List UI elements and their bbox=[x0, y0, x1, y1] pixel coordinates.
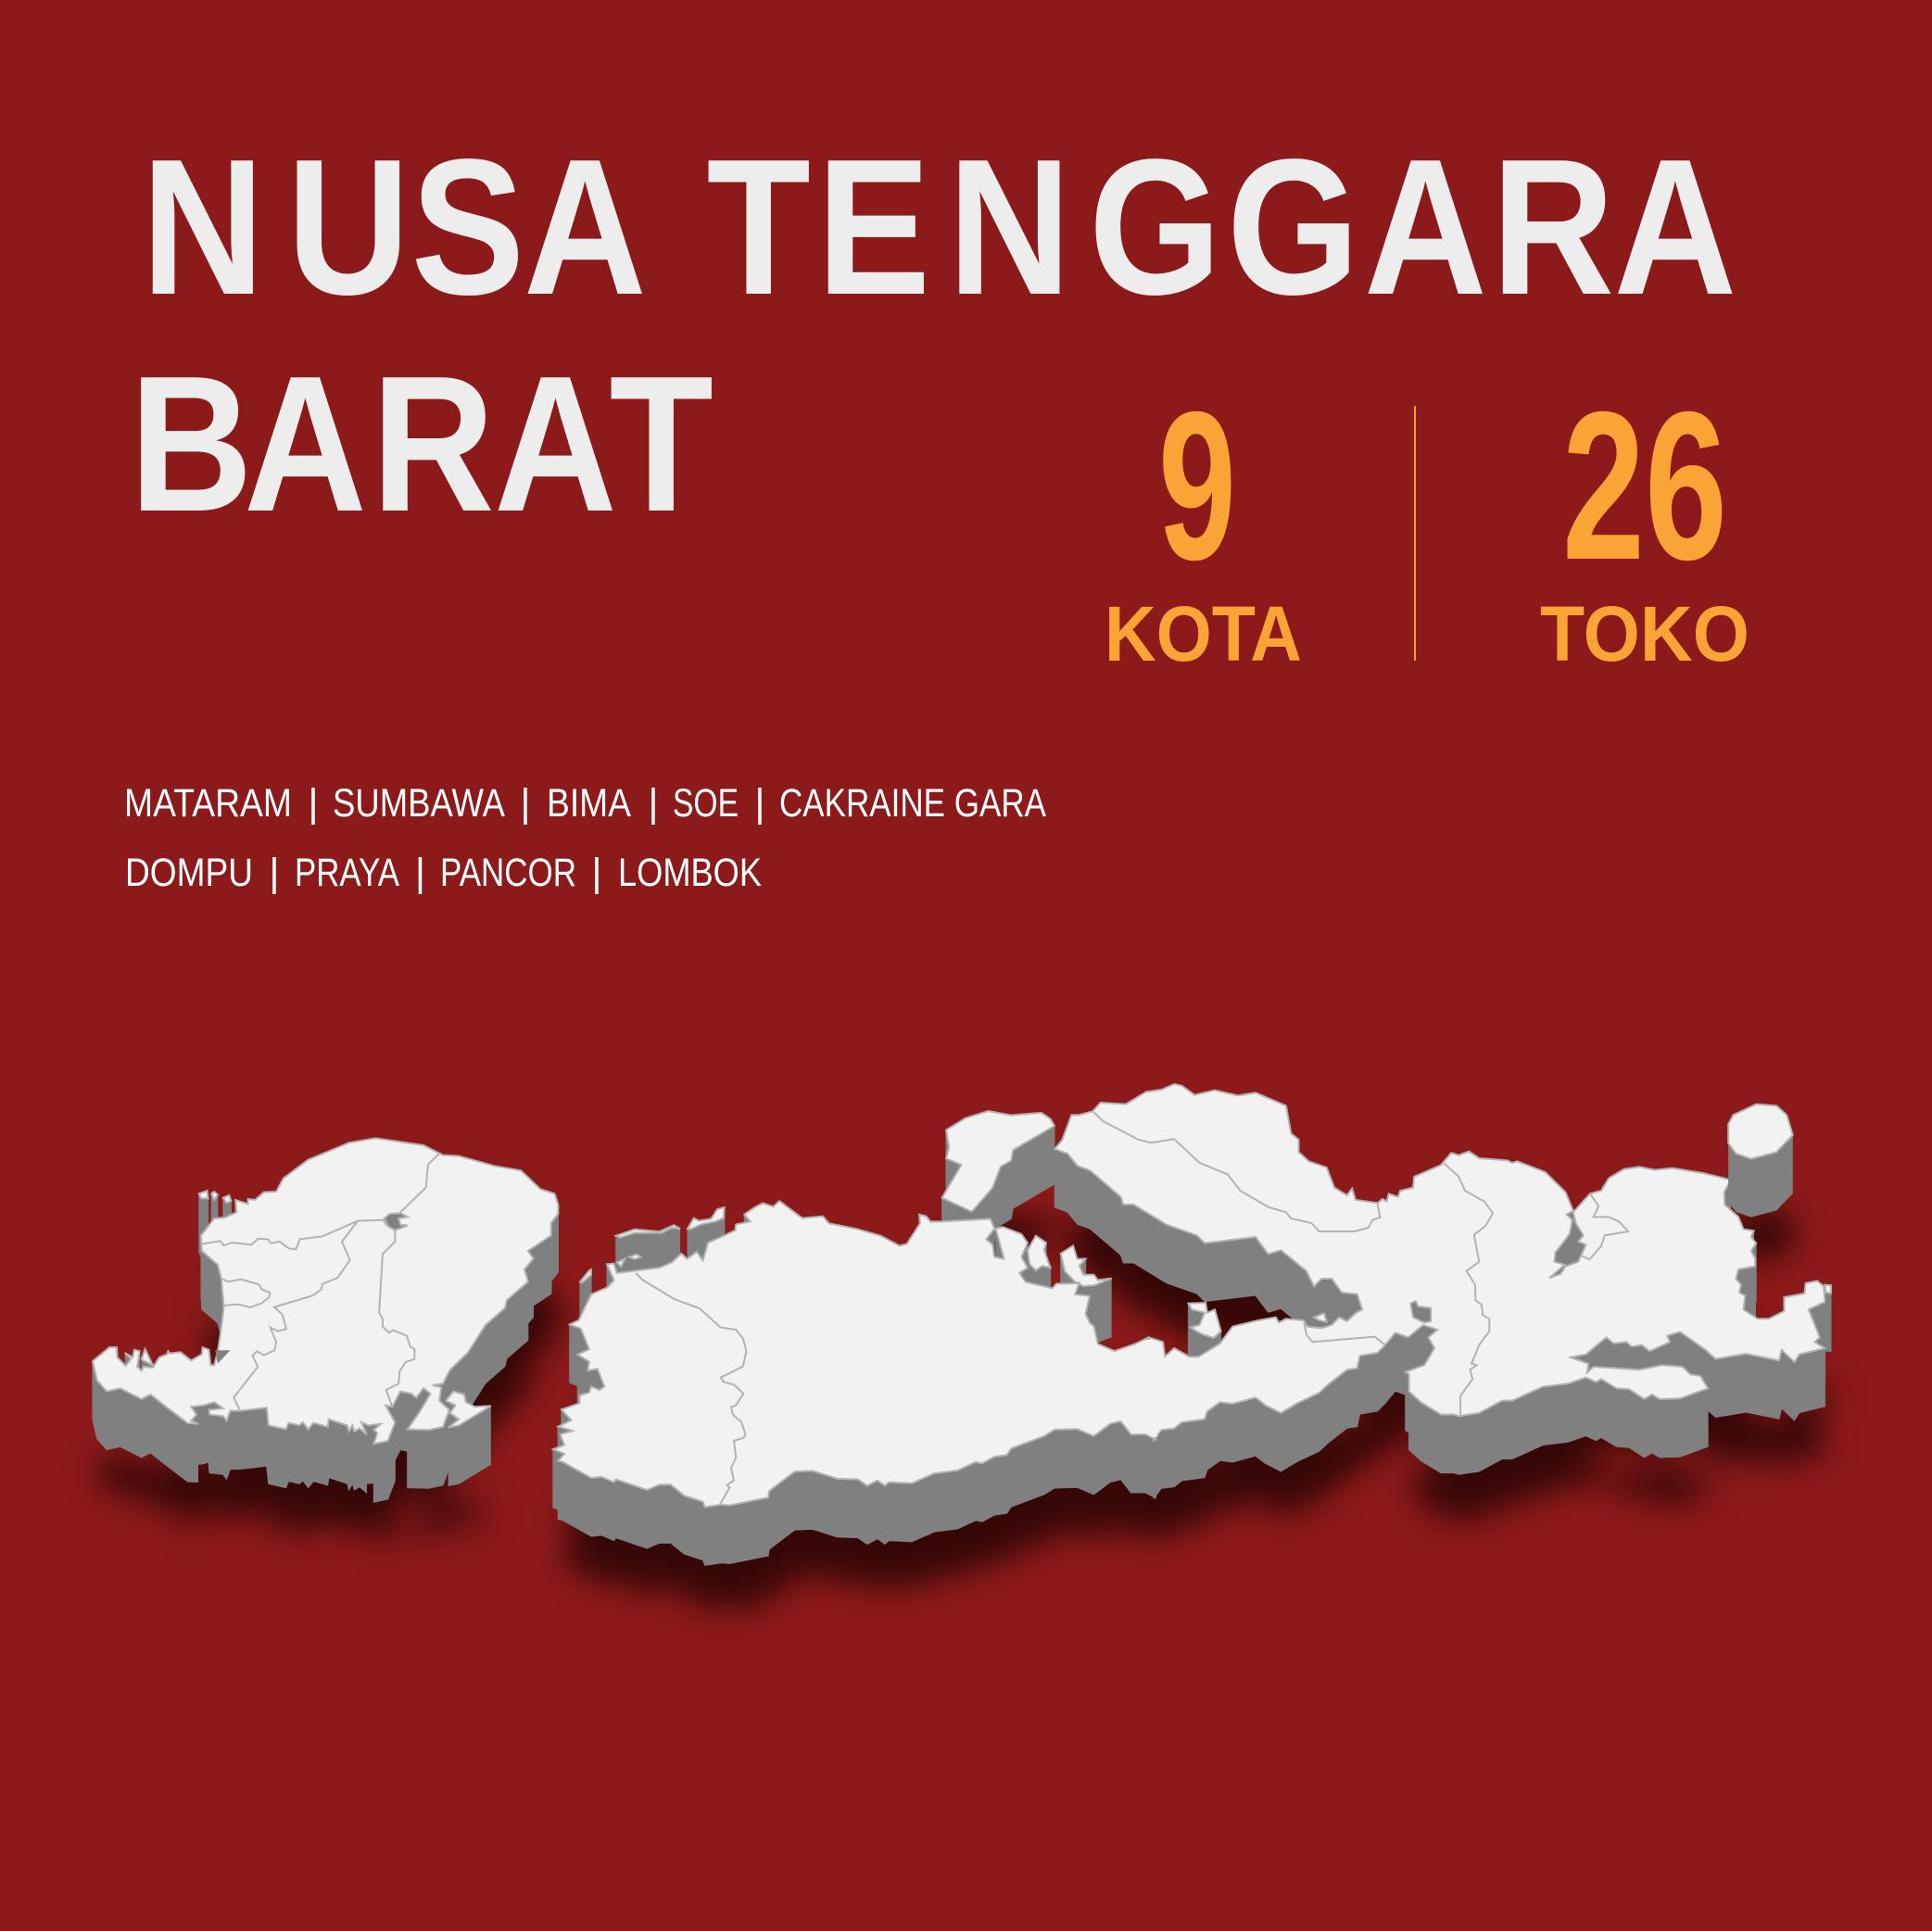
regional boundary lines bbox=[202, 1111, 1628, 1506]
city list bbox=[124, 781, 1046, 895]
city list: | bbox=[269, 851, 280, 895]
divider bbox=[1414, 406, 1416, 661]
city list: PANCOR bbox=[440, 851, 576, 895]
city list: | bbox=[308, 781, 319, 826]
title bbox=[130, 119, 1736, 552]
city list: | bbox=[754, 781, 765, 826]
map island side walls bbox=[93, 1084, 1831, 1507]
city list: | bbox=[648, 781, 659, 826]
stat: 26 toko: TOKO bbox=[1540, 590, 1749, 677]
city list: DOMPU bbox=[125, 851, 253, 895]
city list: | bbox=[415, 851, 425, 895]
island: Sumbawa west and Moyo bbox=[553, 1111, 1155, 1507]
city list: SOE bbox=[673, 781, 739, 826]
city list: LOMBOK bbox=[618, 851, 762, 895]
island: Sumbawa east and Sanggar bbox=[1054, 1084, 1831, 1440]
title: NUSA bbox=[142, 119, 647, 335]
stat: 9 kota: 9 bbox=[1158, 369, 1236, 604]
title: BARAT bbox=[130, 335, 713, 552]
stat: 9 kota: KOTA bbox=[1105, 590, 1302, 677]
map shadow bbox=[97, 1188, 1836, 1610]
city list: SUMBAWA bbox=[333, 781, 505, 826]
stat: 9 kota bbox=[1105, 369, 1302, 677]
map island top faces bbox=[93, 1084, 1831, 1507]
island: Lombok bbox=[93, 1138, 558, 1444]
city list: PRAYA bbox=[295, 851, 399, 895]
city list: | bbox=[520, 781, 531, 826]
title: TENGGARA bbox=[707, 119, 1736, 335]
island: cylinder islet bbox=[1728, 1104, 1793, 1218]
city list: MATARAM bbox=[124, 781, 292, 826]
stat: 26 toko: 26 bbox=[1562, 369, 1727, 604]
city list: BIMA bbox=[547, 781, 631, 826]
stat: 26 toko bbox=[1540, 369, 1749, 677]
seam cover bbox=[1149, 1340, 1155, 1437]
city list: | bbox=[591, 851, 602, 895]
city list: CAKRAINE GARA bbox=[779, 781, 1046, 826]
